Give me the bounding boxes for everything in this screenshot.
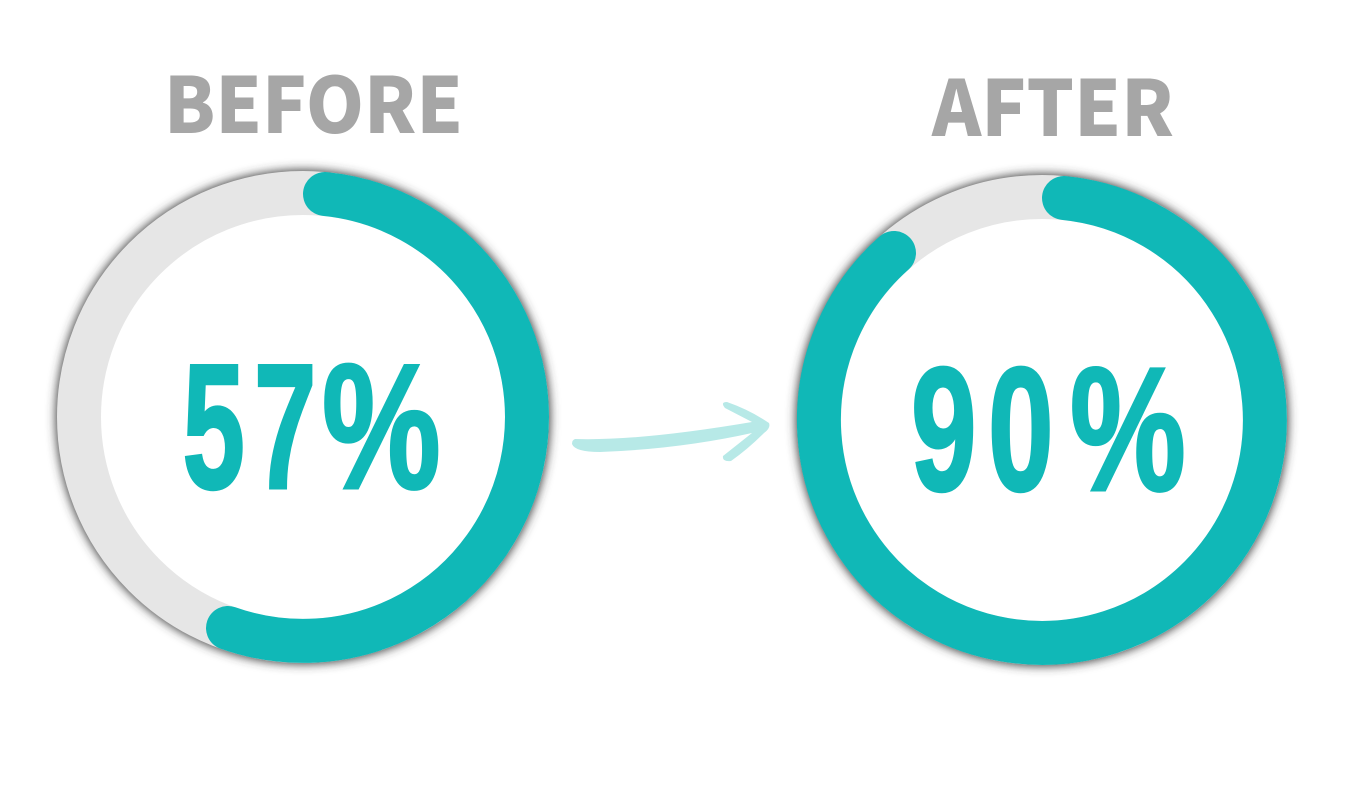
progress arc: after (819, 198, 1265, 643)
heading: after: AFTER (931, 48, 1174, 159)
donut chart: before 57% (56, 170, 550, 664)
value: 90% (911, 330, 1186, 528)
value: 90%: 9 (911, 330, 977, 528)
value: 57% (182, 326, 441, 526)
arrow (572, 402, 769, 461)
progress arc: before (228, 194, 527, 641)
value: 57%: % (322, 328, 441, 526)
value: 57%: 7 (254, 326, 316, 526)
value: 90%: % (1070, 331, 1186, 528)
value: 90%: 0 (988, 330, 1054, 528)
heading: before: BEFORE (164, 45, 463, 156)
value: 57%: 5 (182, 326, 245, 526)
donut chart: after 90% (796, 174, 1288, 666)
